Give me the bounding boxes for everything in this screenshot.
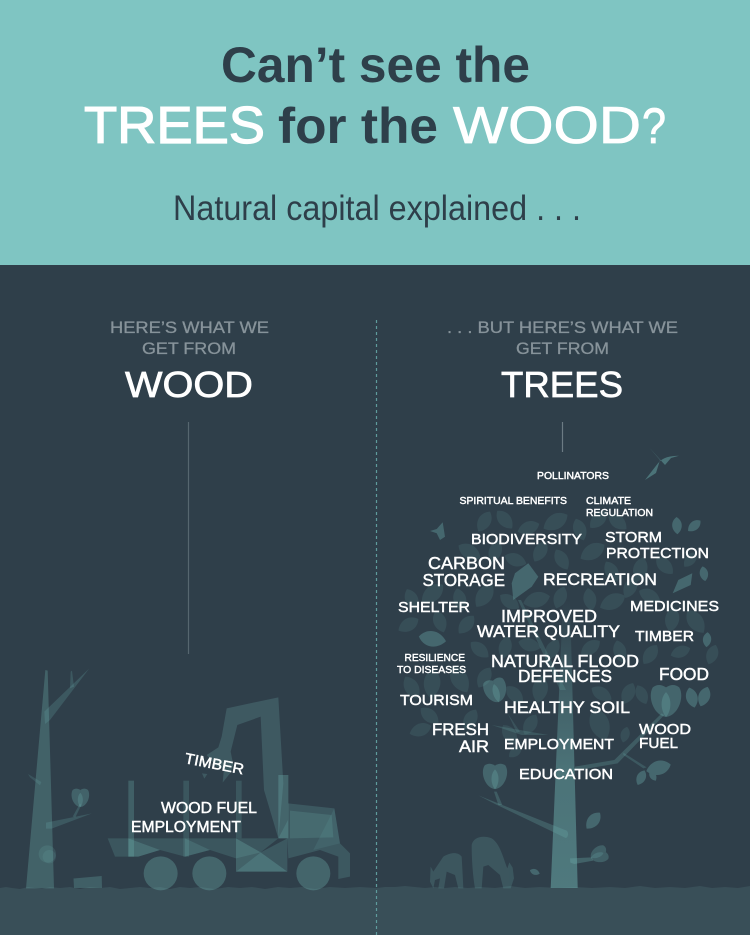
trees heading: . . . BUT HERE’S WHAT WE xyxy=(447,318,678,337)
illustration: canopy leaves xyxy=(395,507,721,760)
machine bed xyxy=(108,838,278,858)
tree benefit labels: FUEL xyxy=(639,735,678,752)
title: for the xyxy=(278,98,438,154)
tree benefit labels: MEDICINES xyxy=(630,598,719,615)
illustration: forestry machine xyxy=(108,697,350,890)
tree benefit labels: REGULATION xyxy=(586,507,653,519)
tree benefit labels: FOOD xyxy=(659,664,709,684)
tree benefit labels: RECREATION xyxy=(543,570,657,589)
subtitle: Natural capital explained . . . xyxy=(173,189,581,228)
title: TREES xyxy=(84,97,265,155)
trees vertical line xyxy=(562,422,564,452)
panel: wood column xyxy=(26,318,350,890)
tree benefit labels: BIODIVERSITY xyxy=(471,531,582,548)
tree benefit labels: IMPROVED xyxy=(501,606,597,626)
illustration: dead tree xyxy=(26,668,92,888)
wood benefit labels: TIMBER xyxy=(183,750,246,778)
trees heading: TREES xyxy=(501,364,623,405)
illustration: tree trunk and branches xyxy=(478,600,664,888)
tree benefit labels: SPIRITUAL BENEFITS xyxy=(460,495,567,507)
tree benefit labels: NATURAL FLOOD xyxy=(491,651,639,671)
tree benefit labels: CLIMATE xyxy=(586,495,631,507)
icon: butterfly xyxy=(430,522,445,540)
tree benefit labels: CARBON xyxy=(428,553,505,573)
tree benefit labels: FRESH xyxy=(432,720,489,739)
tree benefit labels: STORAGE xyxy=(422,570,505,590)
tree benefit labels: TIMBER xyxy=(635,628,694,645)
illustration: bright leaves xyxy=(417,517,713,876)
tree benefit labels: SHELTER xyxy=(398,599,470,616)
machine arm xyxy=(207,697,283,838)
trees heading xyxy=(447,318,678,405)
wood benefit labels xyxy=(131,750,257,836)
title: WOOD xyxy=(453,97,641,155)
wood heading: GET FROM xyxy=(142,339,236,358)
trees heading: GET FROM xyxy=(516,339,609,358)
machine cab xyxy=(278,803,350,879)
title: Can’t see the xyxy=(221,37,530,93)
tree benefit labels: EDUCATION xyxy=(519,766,613,783)
wood benefit labels: WOOD FUEL xyxy=(161,800,257,817)
tree benefit labels: STORM xyxy=(605,529,662,546)
title xyxy=(84,37,666,155)
tree benefit labels: POLLINATORS xyxy=(537,470,609,482)
tree benefit labels: TOURISM xyxy=(400,692,473,709)
icon: hummingbird xyxy=(645,447,679,480)
tree benefit labels: DEFENCES xyxy=(518,666,612,686)
title: ? xyxy=(642,98,666,154)
illustration: deer xyxy=(430,837,514,888)
wood benefit labels: EMPLOYMENT xyxy=(131,819,242,836)
wood heading: HERE’S WHAT WE xyxy=(110,318,269,337)
tree benefit labels: EMPLOYMENT xyxy=(504,736,614,753)
wood vertical line xyxy=(188,422,190,654)
panel: trees column xyxy=(395,318,721,888)
divider xyxy=(376,320,378,935)
panel: header banner xyxy=(0,0,750,265)
machine wheels xyxy=(144,856,178,890)
wood heading xyxy=(110,318,269,405)
tree benefit labels: HEALTHY SOIL xyxy=(504,698,630,717)
ground xyxy=(0,886,750,935)
illustration: stump xyxy=(74,876,102,888)
tree benefit labels: TO DISEASES xyxy=(397,664,466,676)
tree benefit labels: PROTECTION xyxy=(606,545,709,562)
illustration: flowers xyxy=(482,676,681,865)
tree benefit labels xyxy=(397,470,719,783)
tree benefit labels: WATER QUALITY xyxy=(477,622,620,641)
wood heading: WOOD xyxy=(125,364,253,405)
tree benefit labels: WOOD xyxy=(639,721,691,738)
tree benefit labels: AIR xyxy=(459,737,489,756)
tree benefit labels: RESILIENCE xyxy=(404,652,465,664)
